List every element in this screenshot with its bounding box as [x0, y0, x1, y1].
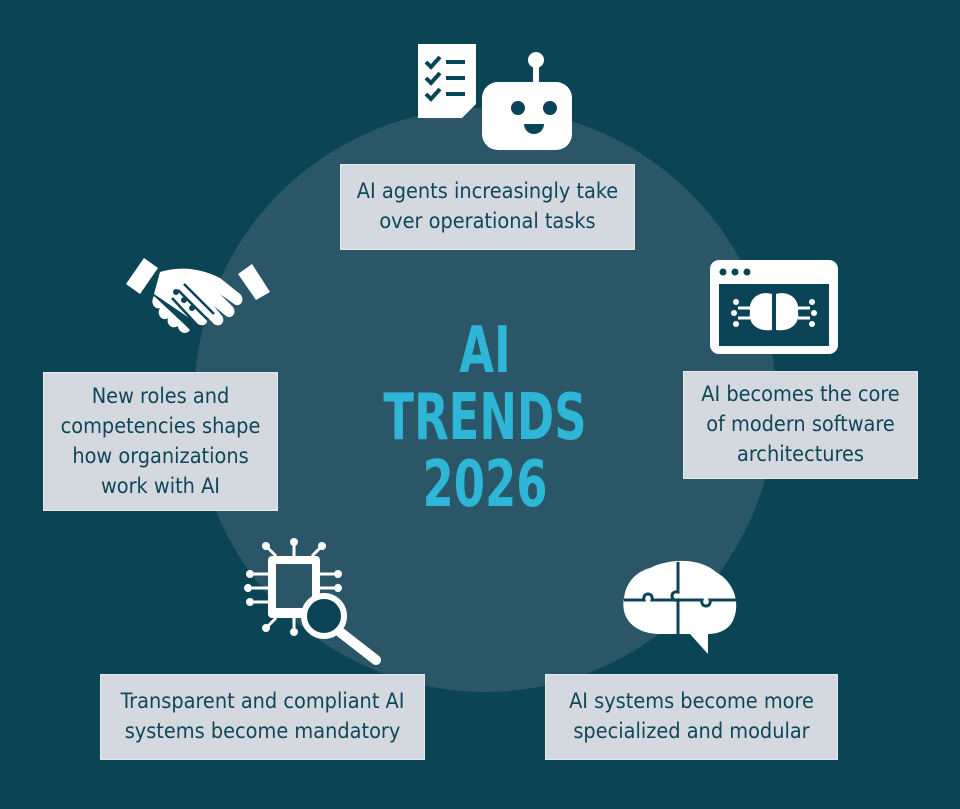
box: specialized and modular: AI systems become more: [569, 689, 814, 714]
icon: puzzle brain: [623, 560, 736, 654]
box: core of architectures: [683, 371, 918, 479]
box: transparent and compliant: Transparent and compliant AI: [121, 689, 404, 714]
box: AI agents: over operational tasks: [379, 209, 596, 234]
icon: checklist and robot: [418, 44, 572, 150]
title: [383, 314, 587, 522]
box: AI agents: [340, 164, 635, 250]
box: core of architectures: architectures: [737, 442, 864, 467]
box: specialized and modular: [545, 674, 838, 760]
box: new roles: [43, 372, 278, 511]
box: AI agents: AI agents increasingly take: [357, 179, 618, 204]
box: core of architectures: AI becomes the core: [701, 382, 900, 407]
box: specialized and modular: specialized and modular: [573, 719, 810, 744]
icon: browser with brain: [710, 260, 838, 354]
box: transparent and compliant: systems become mandatory: [125, 719, 400, 744]
box: transparent and compliant: [100, 674, 425, 760]
title: AI: [459, 314, 511, 388]
box: new roles: New roles and: [92, 384, 229, 408]
box: new roles: how organizations: [72, 444, 249, 468]
box: core of architectures: of modern software: [706, 412, 895, 437]
icon: chip with magnifier: [244, 538, 381, 665]
title: 2026: [423, 448, 547, 522]
icon: handshake: [126, 258, 270, 333]
box: new roles: competencies shape: [61, 414, 260, 438]
box: new roles: work with AI: [101, 474, 220, 498]
title: TRENDS: [383, 381, 587, 455]
